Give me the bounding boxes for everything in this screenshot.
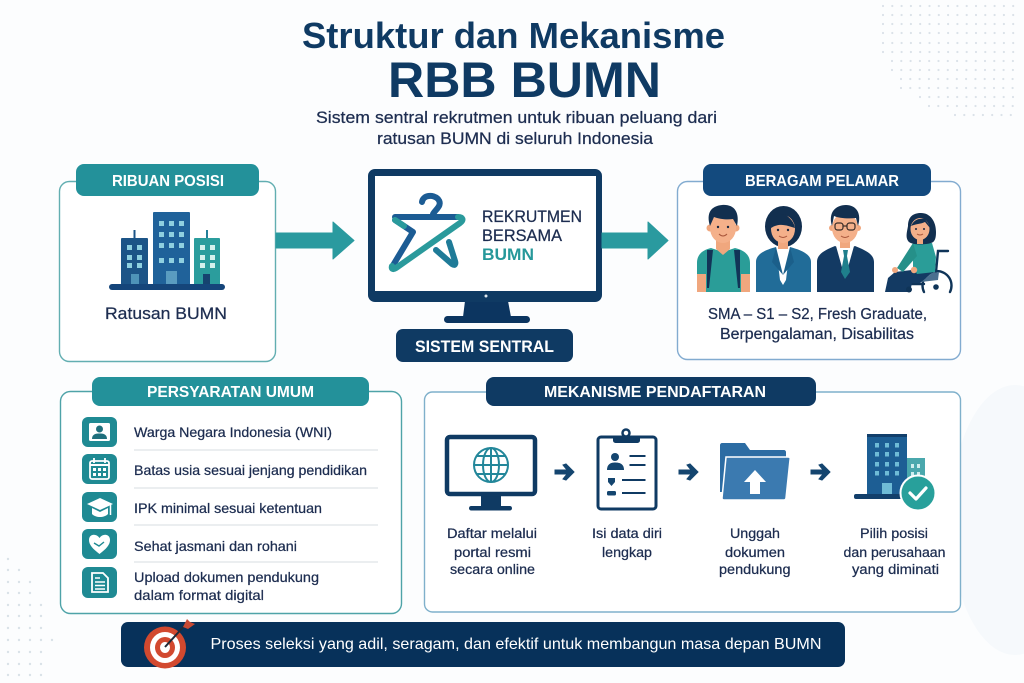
label: ratusan bumn: Ratusan BUMN [105,304,227,323]
heading: persyaratan umum [92,377,369,406]
heading: beragam pelamar [703,164,931,196]
step 2: fill in form: lengkap [602,545,652,560]
icon: target [144,619,195,668]
panel: beragam pelamar [678,164,960,360]
step 2: fill in form [592,430,662,560]
description: applicant types [708,306,927,343]
requirement: citizenship [82,417,332,447]
monitor: central system [368,169,602,323]
step 3: upload documents: pendukung [719,562,790,577]
panel: persyaratan umum [60,377,402,614]
logo text: BUMN [482,246,534,264]
requirement: documents: Upload dokumen pendukung [134,569,319,585]
subtitle: ratusan BUMN di seluruh Indonesia [377,129,654,148]
logo text: BERSAMA [482,227,562,245]
label: sistem sentral [396,329,573,362]
title: Struktur dan Mekanisme [302,15,725,56]
subtitle: Sistem sentral rekrutmen untuk ribuan peluang dari [316,108,717,127]
heading: persyaratan umum: PERSYARATAN UMUM [147,384,314,401]
requirement: citizenship: Warga Negara Indonesia (WNI) [134,424,332,440]
step 4: choose company [844,434,946,577]
panel: ribuan posisi [60,164,276,362]
arrow: step 2 to 3 [679,464,698,480]
label: sistem sentral: SISTEM SENTRAL [415,338,554,356]
step 1: online portal: Daftar melalui [447,526,537,541]
requirement: gpa: IPK minimal sesuai ketentuan [134,500,322,516]
requirement: health: Sehat jasmani dan rohani [134,538,297,554]
title [302,15,725,108]
requirement: health [82,529,297,559]
heading: ribuan posisi: RIBUAN POSISI [112,173,224,190]
arrow: system to applicants [602,222,668,259]
description: applicant types: SMA – S1 – S2, Fresh Graduate, [708,306,927,323]
footer banner: Proses seleksi yang adil, seragam, dan efektif untuk membangun masa depan BUMN [210,636,822,653]
step 4: choose company: dan perusahaan [844,545,946,560]
step 4: choose company: yang diminati [852,562,939,577]
requirement: age limit: Batas usia sesuai jenjang pendidikan [134,462,367,478]
step 1: online portal [447,437,537,577]
step 4: choose company: Pilih posisi [860,526,928,541]
heading: ribuan posisi [76,164,259,196]
heading: beragam pelamar: BERAGAM PELAMAR [745,173,899,190]
panel: mekanisme pendaftaran [424,377,960,612]
logo text [482,208,582,264]
title: RBB BUMN [388,52,661,108]
logo: star hanger [392,196,462,269]
person: student [697,205,750,292]
requirement: documents: dalam format digital [134,587,264,603]
icon: buildings [109,212,225,290]
requirement: age limit [82,454,367,484]
arrow: step 3 to 4 [811,464,830,480]
step 1: online portal: portal resmi [454,545,531,560]
person: wheelchair user [885,213,952,292]
step 3: upload documents [719,443,790,577]
step 3: upload documents: Unggah [730,526,780,541]
requirement: documents [82,567,319,603]
step 2: fill in form: Isi data diri [592,526,662,541]
arrow: positions to system [276,222,354,259]
step 3: upload documents: dokumen [725,545,785,560]
arrow: step 1 to 2 [555,464,574,480]
heading: mekanisme pendaftaran: MEKANISME PENDAFTARAN [544,384,766,401]
footer banner [121,619,845,668]
person: professional man [817,205,874,292]
person: graduate woman [756,206,811,292]
description: applicant types: Berpengalaman, Disabilitas [720,326,914,343]
heading: mekanisme pendaftaran [486,377,816,406]
subtitle [316,108,717,148]
logo text: REKRUTMEN [482,208,582,226]
step 1: online portal: secara online [450,562,535,577]
requirement: gpa [82,492,322,522]
